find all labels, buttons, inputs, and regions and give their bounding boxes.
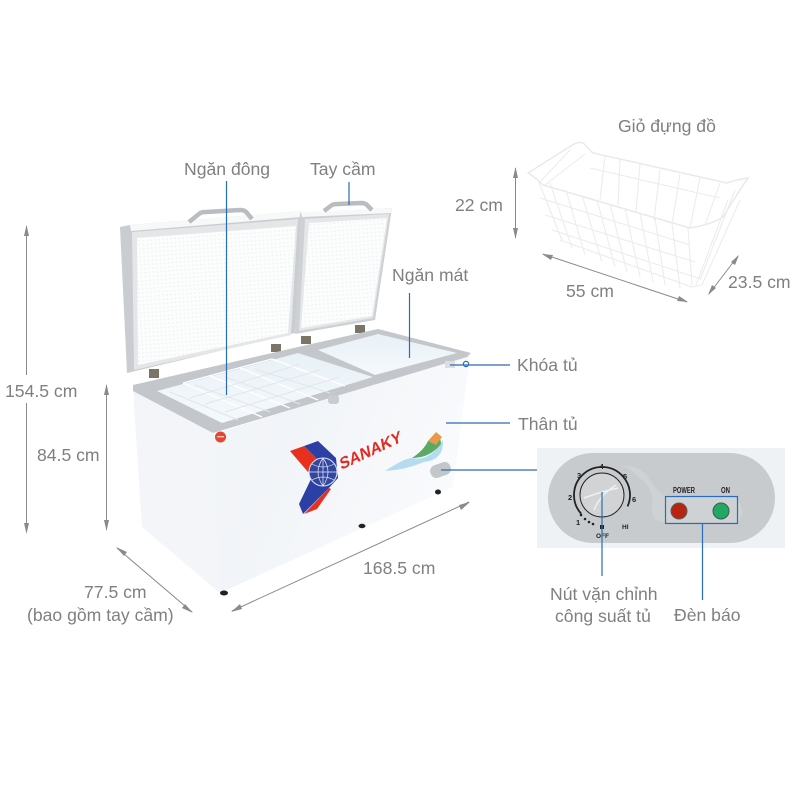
dial: HI: [622, 524, 629, 531]
dial: 2: [568, 493, 572, 502]
label: 22 cm: 22 cm: [455, 195, 503, 215]
dimension arrow: 55 cm: [542, 254, 688, 302]
label: 23.5 cm: 23.5 cm: [728, 272, 791, 292]
red light: [671, 503, 687, 519]
callout line: Thân tủ: [446, 422, 510, 424]
dimension arrow: 23.5 cm: [708, 255, 739, 295]
on label: ON: [721, 486, 730, 495]
dial: 6: [632, 495, 636, 504]
decorative wave graphic: [385, 432, 443, 471]
callout line: Khóa tủ: [450, 361, 510, 367]
hinges: [149, 325, 365, 378]
panel body: [548, 453, 775, 543]
callout line: control panel: [441, 469, 537, 471]
dial: [562, 455, 642, 540]
dimension arrow: 168.5 cm: [231, 502, 470, 612]
dimension arrow: 154.5 cm: [24, 225, 29, 534]
label: Ngăn đông: Ngăn đông: [184, 159, 270, 179]
freezer chest: [120, 203, 471, 596]
label: 154.5 cm: 154.5 cm: [5, 381, 77, 401]
green light: [713, 503, 729, 519]
logo: Sanaky emblem: [290, 441, 338, 514]
label: Giỏ đựng đồ: Giỏ đựng đồ: [618, 116, 716, 136]
logo: Sanaky wordmark: SANAKY: [338, 427, 403, 474]
freezer compartment with baskets: [157, 353, 373, 423]
dial: 5: [623, 472, 627, 481]
right handle: [324, 203, 372, 211]
label: Thân tủ: Thân tủ: [518, 414, 578, 434]
label: 77.5 cm: 77.5 cm: [84, 582, 147, 602]
mini control panel: [428, 460, 453, 480]
energy sticker: [215, 432, 226, 442]
top rim: [133, 329, 471, 433]
callout: Đèn báo bracket: [666, 496, 738, 600]
callout line: Ngăn đông: [226, 181, 228, 395]
dimension arrow: 84.5 cm: [104, 384, 109, 531]
dimension arrow: 77.5 cm: [116, 547, 193, 613]
dial: 1: [576, 518, 580, 527]
power label: POWER: [673, 486, 695, 495]
label: Nút vặn chỉnh công suất tủ: công suất tủ: [555, 606, 651, 626]
label: Khóa tủ: Khóa tủ: [517, 355, 578, 375]
label: Tay cầm: Tay cầm: [310, 159, 376, 179]
basket: [528, 142, 748, 288]
label: 55 cm: 55 cm: [566, 281, 614, 301]
label: Ngăn mát: Ngăn mát: [392, 265, 468, 285]
dial: 4: [600, 462, 604, 471]
callout line: Tay cầm: [348, 182, 350, 205]
control panel inset: [537, 448, 785, 548]
dial: OFF: [596, 533, 609, 540]
label: Đèn báo: Đèn báo: [674, 605, 741, 625]
right lid: [295, 208, 392, 334]
left handle: [189, 210, 252, 222]
dimension arrow: 22 cm: [513, 167, 518, 239]
body: [133, 355, 470, 593]
lock latch: [328, 395, 339, 404]
label: Nút vặn chỉnh công suất tủ: Nút vặn chỉnh: [550, 584, 658, 604]
callout line: Ngăn mát: [408, 293, 410, 358]
label: bao gồm tay cầm: (bao gồm tay cầm): [27, 605, 174, 625]
dial: 3: [577, 471, 581, 480]
cooler compartment: [318, 334, 457, 375]
label: Nút vặn chỉnh công suất tủ: [550, 584, 658, 626]
label: 168.5 cm: 168.5 cm: [363, 558, 435, 578]
lock: [445, 361, 455, 368]
callout line: Nút vặn: [601, 492, 603, 576]
left lid: [120, 211, 303, 373]
label: 84.5 cm: 84.5 cm: [37, 445, 100, 465]
feet: [220, 490, 441, 596]
